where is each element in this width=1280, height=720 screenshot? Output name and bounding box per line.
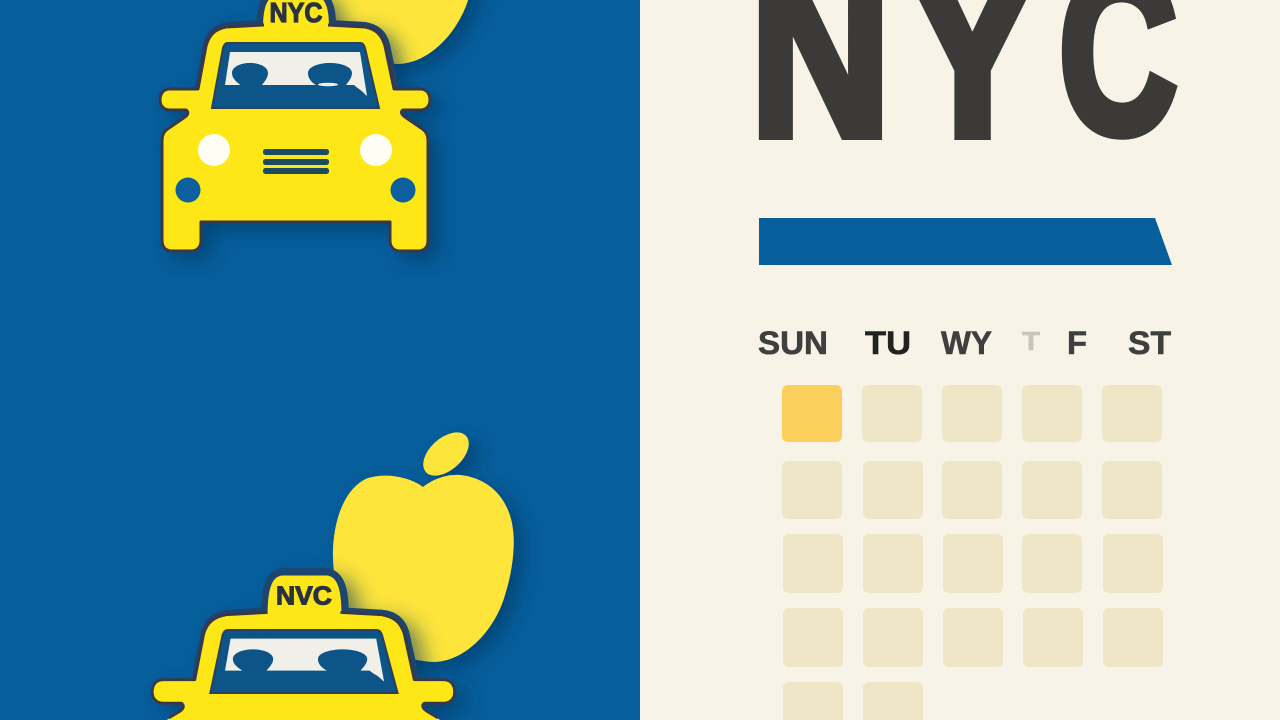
fog lights (176, 178, 200, 202)
calendar weekday labels: F (1067, 325, 1087, 361)
window glass (225, 52, 367, 96)
calendar weekday labels: ST (1128, 325, 1171, 361)
panel: cream right background (640, 0, 1280, 720)
icon: top apple (297, 0, 478, 64)
roof halo (200, 0, 394, 88)
windshield (212, 43, 379, 108)
apple leaf (415, 424, 477, 484)
calendar weekday labels: SUN (758, 325, 828, 361)
calendar grid (782, 385, 1163, 720)
sign neck fill (264, 20, 328, 28)
headlights (198, 134, 230, 166)
taxi sign (268, 576, 341, 616)
roof halo (197, 573, 414, 679)
windshield and passengers (210, 630, 397, 693)
grille (263, 149, 329, 155)
blue banner bar (759, 218, 1172, 265)
taxi body (160, 25, 430, 251)
title: NYC (750, 0, 1177, 184)
window glass (225, 639, 384, 681)
taxi sign (263, 0, 329, 28)
taxi body fill (152, 612, 455, 720)
calendar weekday labels: TU (865, 325, 911, 361)
highlighted day (782, 385, 842, 442)
icon: top taxi (160, 0, 430, 251)
passengers (214, 63, 372, 106)
calendar weekday labels (758, 325, 1171, 361)
icon: bottom apple (333, 424, 514, 662)
passengers (213, 649, 390, 691)
calendar weekday labels: T (1022, 326, 1040, 356)
passenger highlight (318, 83, 338, 86)
taxi body outline (152, 612, 455, 718)
apple body (333, 475, 514, 662)
panel: blue left background (0, 0, 640, 720)
windshield (210, 630, 397, 693)
calendar weekday labels: WY (941, 325, 992, 361)
icon: bottom taxi (152, 573, 455, 720)
taxi sign label: NVC (276, 583, 332, 611)
